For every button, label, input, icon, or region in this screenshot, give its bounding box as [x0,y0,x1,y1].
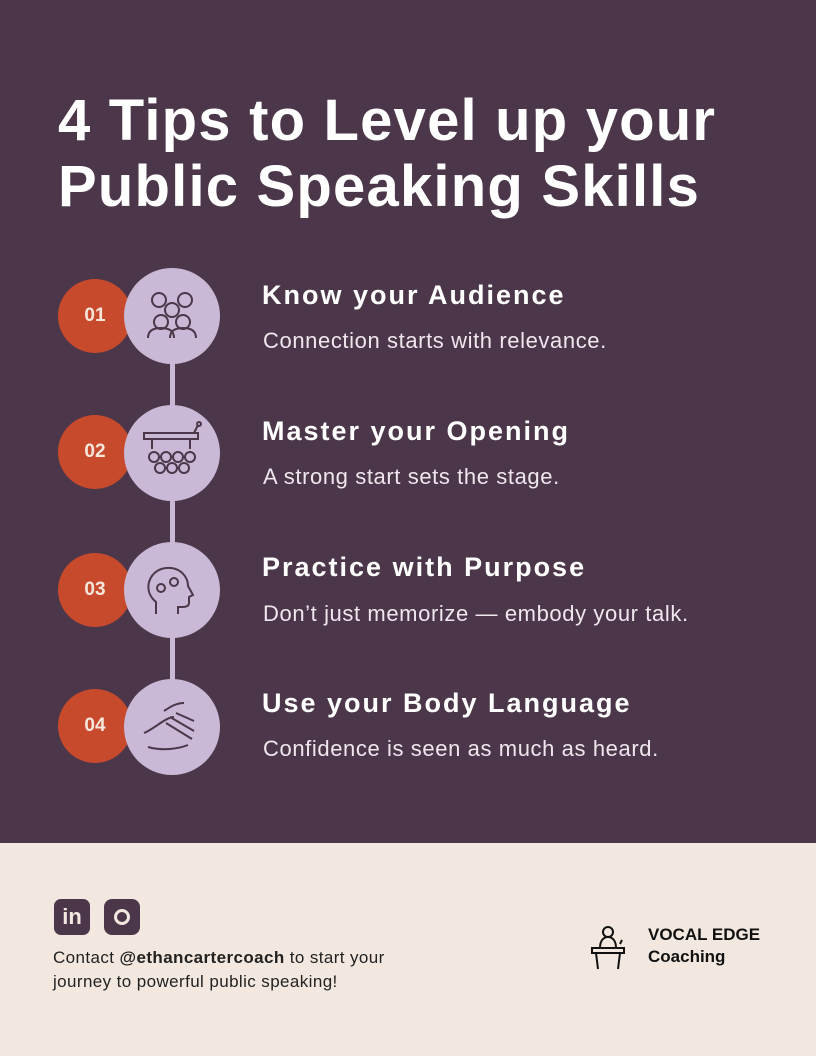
title: Public Speaking Skills [58,154,700,219]
logo: Vocal Edge Coaching: VOCAL EDGE [648,925,760,944]
step 4 text: Confidence is seen as much as heard. [263,736,659,761]
step 3 number [58,553,132,627]
icon: instagram [104,899,140,935]
logo: Vocal Edge Coaching [591,925,760,970]
step 1 number [58,279,132,353]
step 3 icon: head with gears [124,542,220,638]
step 4 heading: Use your Body Language [262,688,632,718]
step 2 icon: podium and audience [124,405,220,501]
step 1 number: 01 [84,305,106,326]
logo: Vocal Edge Coaching: Coaching [648,947,725,966]
header panel background [0,0,816,843]
step 4 number [58,689,132,763]
timeline connector line [170,330,175,730]
icon: linkedin [54,899,90,935]
footer contact text: journey to powerful public speaking! [53,972,338,991]
step 1 text: Connection starts with relevance. [263,328,607,353]
step 2 text: A strong start sets the stage. [263,464,560,489]
title: 4 Tips to Level up your [58,88,716,153]
step 1 heading: Know your Audience [262,280,566,310]
step 3 heading: Practice with Purpose [262,552,586,582]
title [58,88,716,219]
step 1 icon: audience [124,268,220,364]
step 2 heading: Master your Opening [262,416,570,446]
step 4 icon: hands [124,679,220,775]
footer contact text [52,948,385,991]
footer contact text: Contact @ethancartercoach to start your [53,948,385,967]
icon: linkedin: in [62,904,82,929]
step 2 number [58,415,132,489]
step 4 number: 04 [84,715,106,736]
step 3 number: 03 [84,579,106,600]
step 3 text: Don’t just memorize — embody your talk. [263,601,689,626]
step 2 number: 02 [84,441,106,462]
